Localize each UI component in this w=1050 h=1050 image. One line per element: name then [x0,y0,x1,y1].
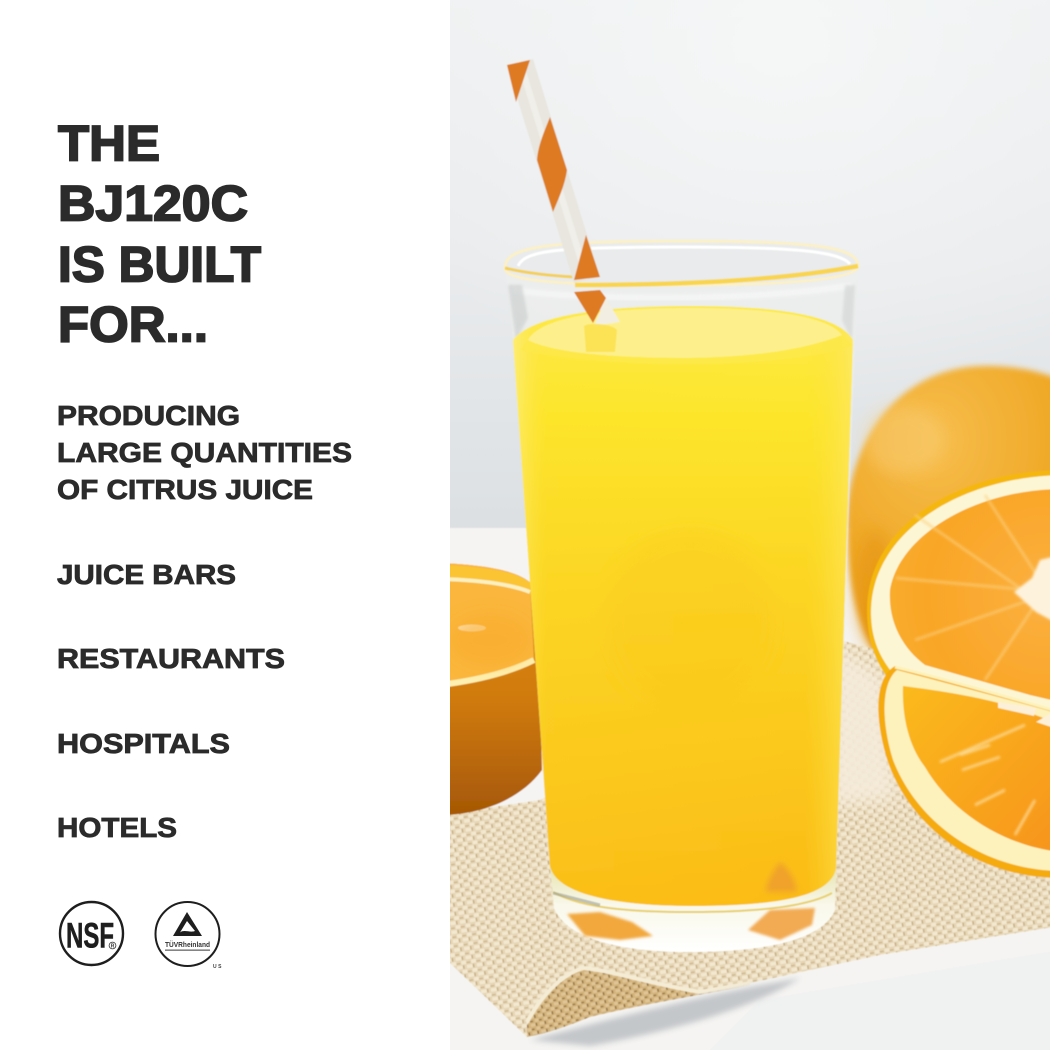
white table [440,528,1050,1050]
orange pith centre [1014,555,1050,625]
cast shadow on table [530,978,800,1046]
refracted orange in base [567,912,653,940]
use: hospitals: HOSPITALS [57,728,230,759]
rim front yellow line [575,266,858,285]
glass base [550,866,836,952]
title: BJ120C [58,174,248,232]
cut orange half left [440,563,542,815]
upper glass walls [508,285,528,340]
soft juice glow [605,530,775,710]
use: producing large quantities of citrus juice: PRODUCING [57,400,240,431]
use: producing large quantities of citrus juice [57,400,352,505]
title: IS BUILT [58,236,261,292]
use: hotels: HOTELS [57,812,177,843]
title: THE [58,114,160,171]
orange segment lines [896,495,1040,680]
burlap fold ridge [527,968,750,1022]
icon: NSF certification badge: R [111,944,115,950]
title [58,114,261,352]
icon: TUV Rheinland certification badge: US [213,964,223,970]
icon: NSF certification badge: NSF [66,916,114,956]
title: FOR... [58,296,208,352]
white text panel [0,0,450,1050]
icon: NSF certification badge [60,902,123,965]
use: producing large quantities of citrus juice: LARGE QUANTITIES [57,437,352,468]
burlap fold underside [527,968,750,1037]
icon: TUV Rheinland certification badge [156,902,223,970]
glass of juice [505,241,858,952]
photo: glass of orange juice with oranges [440,0,1050,1050]
straw in juice [584,324,617,352]
half orange face right [867,470,1050,720]
burlap cloth [440,640,1050,1046]
juice surface [528,308,842,358]
use: juice bars: JUICE BARS [57,559,236,590]
use list [57,400,352,843]
use: restaurants: RESTAURANTS [57,643,285,674]
rim back [505,241,858,285]
pulp at glass bottom [766,862,797,892]
whole orange behind right [847,366,1050,662]
orange wedge right [878,666,1050,878]
juice body [513,306,853,906]
glass body [530,458,850,882]
icon: TUV Rheinland certification badge: TÜVRheinland [165,940,210,949]
wall background [440,0,1050,530]
use: producing large quantities of citrus juice: OF CITRUS JUICE [57,474,313,505]
striped straw [507,58,620,352]
